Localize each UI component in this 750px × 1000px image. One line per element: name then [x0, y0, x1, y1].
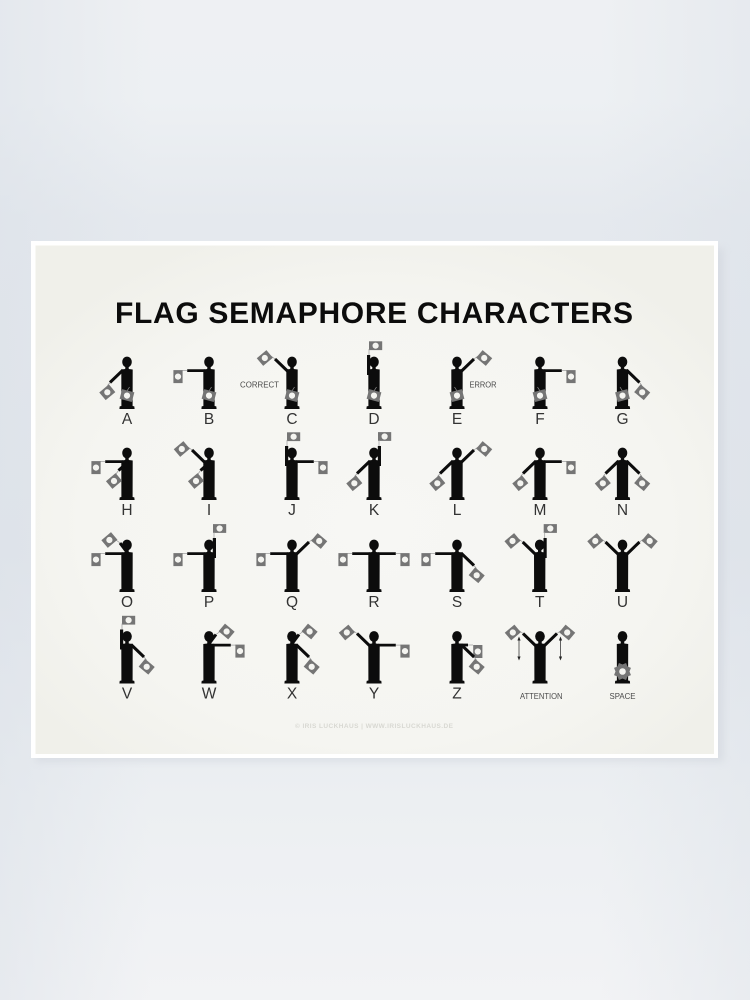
figure A: [99, 357, 135, 428]
figure J: [284, 432, 328, 519]
figure P: P: [204, 594, 214, 611]
figure E: [449, 350, 492, 428]
figure O: [91, 532, 135, 611]
figure C: C: [286, 411, 298, 428]
figure S: S: [452, 594, 462, 611]
figure U: [587, 533, 658, 611]
figure I: [174, 441, 217, 519]
figure Q: [256, 533, 327, 611]
figure F: F: [535, 411, 545, 428]
figure V: V: [122, 686, 133, 702]
figure R: R: [368, 594, 380, 611]
figure D: [366, 341, 382, 428]
figure: attention: [505, 625, 575, 684]
poster shadow: [36, 248, 724, 762]
arrow: attention right: [559, 636, 562, 660]
figure K: [346, 432, 391, 519]
figure Y: [339, 625, 410, 702]
figure M: M: [534, 502, 546, 519]
label: attention: ATTENTION: [520, 692, 563, 701]
figure Y: Y: [369, 686, 379, 702]
figure A: A: [122, 411, 133, 428]
figure N: N: [617, 502, 628, 519]
arrow: attention left: [517, 636, 521, 660]
figure L: L: [453, 502, 462, 519]
figure W: W: [202, 686, 217, 702]
figure Z: [449, 631, 485, 702]
figure S: [421, 540, 485, 611]
figure I: I: [207, 502, 211, 519]
figure J: J: [288, 502, 296, 519]
figure K: K: [369, 502, 380, 519]
figure T: [504, 524, 557, 611]
label: error: ERROR: [470, 380, 497, 390]
figure X: X: [287, 686, 298, 702]
figure P: [173, 524, 226, 611]
title: FLAG SEMAPHORE CHARACTERS: [115, 297, 633, 330]
label: space: SPACE: [610, 692, 636, 701]
figure D: D: [368, 411, 380, 428]
figure R: [338, 540, 410, 611]
poster: white border and paper: [31, 241, 718, 758]
footer credit: © IRIS LUCKHAUS | WWW.IRISLUCKHAUS.DE: [295, 722, 454, 730]
figure L: [429, 441, 492, 519]
figure: space: [614, 631, 631, 684]
figure E: E: [452, 411, 462, 428]
figure H: [91, 448, 135, 519]
figure N: [595, 448, 650, 519]
figure F: [532, 357, 576, 428]
figure G: [615, 357, 650, 428]
figure O: O: [121, 594, 133, 611]
figure W: [201, 624, 245, 702]
figure X: [284, 624, 320, 702]
figure T: T: [535, 594, 545, 611]
figure Z: Z: [452, 686, 462, 702]
figure U: U: [617, 594, 628, 611]
figure M: [512, 448, 576, 519]
figure H: H: [121, 502, 133, 519]
figure C: [257, 350, 300, 428]
figure B: B: [204, 411, 214, 428]
label: correct: CORRECT: [240, 380, 279, 390]
figure Q: Q: [286, 594, 298, 611]
figure G: G: [616, 411, 629, 428]
figure V: [119, 616, 155, 702]
figure B: [173, 357, 217, 428]
